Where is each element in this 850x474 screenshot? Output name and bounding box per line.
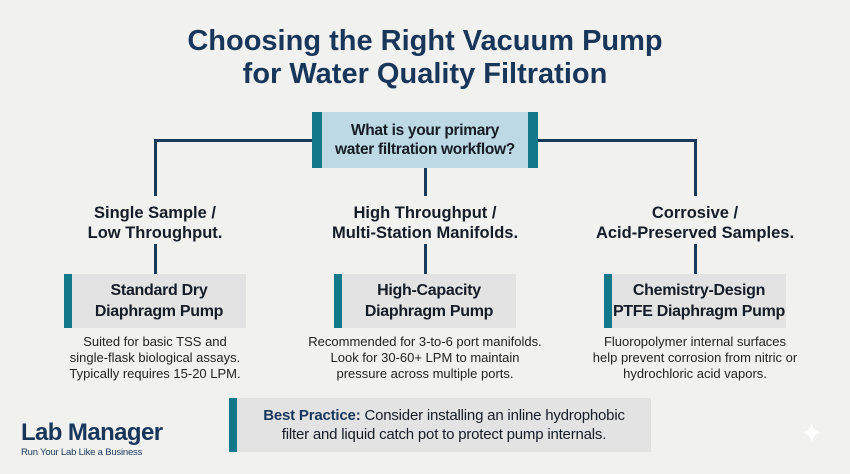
desc: PTFE: hydrochloric acid vapors. — [623, 366, 767, 381]
label: corrosive: Corrosive / — [652, 204, 738, 222]
question box: What is your primary — [351, 122, 499, 139]
desc: standard — [69, 334, 241, 381]
desc: high capacity: Recommended for 3-to-6 port manifolds. — [308, 334, 542, 349]
label: single sample: Low Throughput. — [88, 224, 222, 242]
question box: water filtration workflow? — [335, 141, 515, 158]
desc: PTFE — [593, 334, 797, 381]
desc: PTFE: help prevent corrosion from nitric or — [593, 350, 797, 365]
desc: high capacity: Look for 30-60+ LPM to maintain — [330, 350, 519, 365]
best practice callout: Best Practice: Consider installing an inline hydrophobic — [263, 407, 625, 424]
icon: sparkle: ✦ — [800, 418, 823, 449]
box: standard pump: Standard Dry — [111, 282, 207, 299]
title: Choosing the Right Vacuum Pump — [187, 25, 663, 57]
desc: standard: single-flask biological assays. — [70, 350, 240, 365]
label: corrosive: Acid-Preserved Samples. — [596, 224, 794, 242]
box: PTFE pump — [604, 274, 786, 328]
best practice callout: filter and liquid catch pot to protect pump internals. — [282, 426, 606, 443]
title — [187, 25, 663, 90]
desc: PTFE: Fluoropolymer internal surfaces — [604, 334, 786, 349]
box: high capacity pump: High-Capacity — [377, 282, 481, 299]
label: single sample — [88, 204, 222, 242]
label: corrosive — [596, 204, 794, 242]
box: standard pump: Diaphragm Pump — [95, 303, 223, 320]
box: high capacity pump — [334, 274, 516, 328]
desc: standard: Suited for basic TSS and — [83, 334, 227, 349]
label: high throughput: Multi-Station Manifolds. — [332, 224, 518, 242]
desc: standard: Typically requires 15-20 LPM. — [69, 366, 241, 381]
logo: Run Your Lab Like a Business — [21, 447, 142, 458]
desc: high capacity — [308, 334, 542, 381]
box: high capacity pump: Diaphragm Pump — [365, 303, 493, 320]
logo: Lab Manager — [21, 419, 162, 446]
label: high throughput: High Throughput / — [354, 204, 496, 222]
label: single sample: Single Sample / — [94, 204, 216, 222]
best practice callout — [229, 398, 651, 452]
desc: high capacity: pressure across multiple ports. — [336, 366, 514, 381]
box: PTFE pump: PTFE Diaphragm Pump — [613, 303, 785, 320]
label: high throughput — [332, 204, 518, 242]
question box — [312, 112, 538, 168]
logo — [21, 419, 163, 458]
box: PTFE pump: Chemistry-Design — [633, 282, 765, 299]
box: standard pump — [64, 274, 246, 328]
title: for Water Quality Filtration — [243, 58, 607, 90]
